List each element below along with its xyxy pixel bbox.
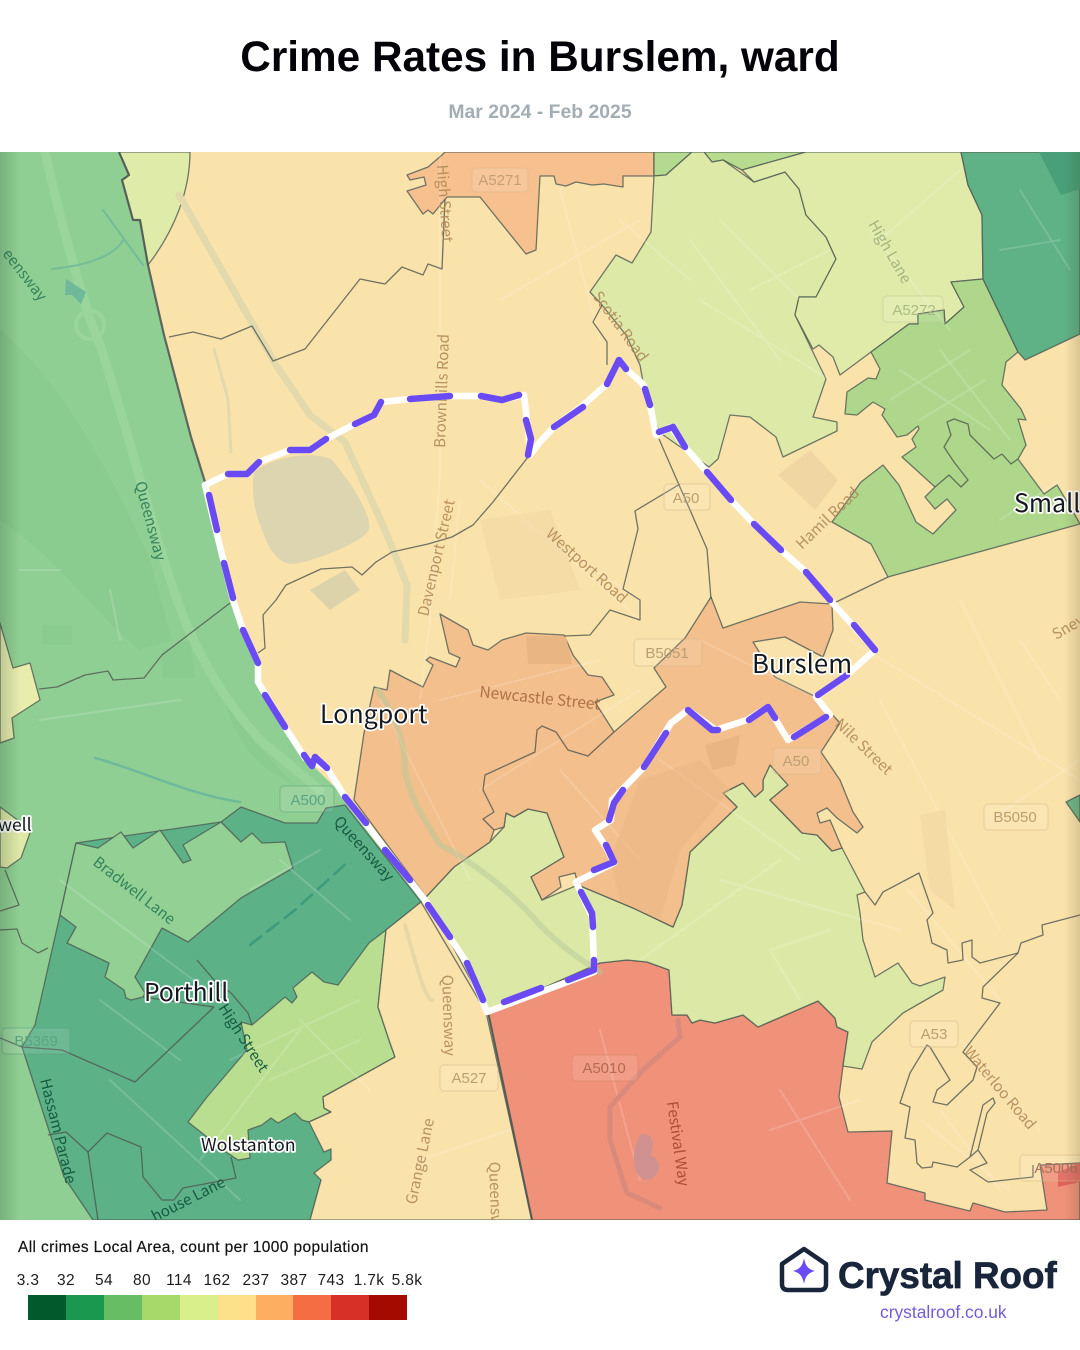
road shields: A5010 — [582, 1060, 626, 1077]
place labels: Small — [1014, 484, 1080, 520]
road labels: Festival Way — [662, 1100, 695, 1188]
south lake — [634, 1134, 659, 1180]
region: north-east pale green — [590, 152, 837, 467]
ward boundary: Burslem — [205, 360, 875, 1012]
icon: Crystal Roof house logo — [780, 1246, 828, 1292]
road shields: A53 — [921, 1026, 947, 1043]
place labels: Wolstanton — [201, 1131, 296, 1157]
logo wordmark: Crystal Roof — [838, 1255, 1057, 1296]
legend scale: 237 — [243, 1272, 269, 1289]
road labels: Bradwell Lane — [89, 851, 180, 929]
road labels: Davenport Street — [412, 497, 460, 618]
road corridors — [45, 152, 680, 1208]
legend scale: 32 — [57, 1272, 75, 1289]
orange darker patches — [526, 636, 740, 920]
region: south tan — [309, 902, 532, 1220]
title: Crime Rates in Burslem, ward — [240, 33, 840, 80]
map base area: tan — [0, 152, 1080, 1220]
region: north-east dark green — [961, 152, 1080, 360]
road labels: Queensway — [329, 811, 399, 886]
road labels: High Street — [432, 164, 458, 243]
place labels — [0, 484, 1080, 1157]
region: south red — [488, 960, 1080, 1220]
region: south-east dark red — [1058, 1163, 1080, 1187]
legend scale: 743 — [318, 1272, 344, 1289]
map right edge shade — [1064, 152, 1080, 1220]
road shields: A50 — [783, 753, 809, 770]
legend scale: 5.8k — [392, 1272, 422, 1289]
road labels: High Lane — [864, 216, 917, 287]
region: west pale — [0, 623, 40, 743]
road labels: High Street — [214, 999, 274, 1076]
region: central-south pale green — [426, 765, 945, 1069]
tan darker patches — [310, 450, 955, 910]
road labels: Hamil Road — [791, 482, 864, 554]
patches in west green — [0, 330, 300, 790]
pond — [65, 279, 86, 304]
road shields: A527 — [451, 1070, 487, 1087]
road labels: Nile Street — [831, 713, 898, 779]
road labels: Waterloo Road — [959, 1042, 1041, 1134]
region: north green wedges — [654, 152, 692, 176]
legend scale: 80 — [133, 1272, 151, 1289]
region boundary lines — [0, 199, 1080, 1220]
legend scale: 387 — [281, 1272, 307, 1289]
road labels: Scotia Road — [588, 287, 653, 366]
faint street network — [20, 152, 1080, 1200]
region: Burslem orange — [354, 597, 863, 927]
road shields: A5272 — [892, 302, 936, 319]
road shields: A5271 — [478, 172, 522, 189]
legend scale — [17, 1272, 422, 1320]
panel: choropleth map — [0, 152, 1080, 1220]
road labels: Westport Road — [542, 523, 632, 608]
road shields: A500 — [290, 792, 326, 809]
road shields — [2, 168, 1080, 1181]
region: west green — [0, 152, 425, 1220]
place labels: Longport — [320, 695, 428, 731]
legend scale: 162 — [204, 1272, 230, 1289]
thick boundary edges — [119, 152, 532, 1220]
region: well pale — [0, 807, 31, 868]
map regions — [0, 152, 1080, 1220]
legend scale: 54 — [95, 1272, 113, 1289]
place labels: Porthill — [144, 973, 228, 1009]
region: east mid-green — [832, 279, 1080, 577]
region: north orange — [407, 152, 654, 254]
legend scale: 1.7k — [354, 1272, 384, 1289]
map left edge shade — [0, 152, 20, 1220]
road labels — [0, 164, 1080, 1243]
region: Bradwell — [60, 822, 293, 1000]
subtitle: date range: Mar 2024 - Feb 2025 — [448, 101, 632, 123]
region: north-west pale wedge — [119, 152, 190, 265]
road shields: A50 — [673, 490, 699, 507]
region: small east green — [1066, 795, 1080, 822]
legend scale: 114 — [166, 1272, 192, 1289]
legend scale: 3.3 — [17, 1272, 39, 1289]
road shields: B5369 — [14, 1033, 58, 1050]
road shields: B5050 — [993, 809, 1037, 826]
place labels: Burslem — [752, 644, 852, 681]
road labels: Grange Lane — [400, 1116, 439, 1206]
website url: crystalroof.co.uk — [880, 1302, 1007, 1322]
road labels: Hassam Parade — [35, 1076, 82, 1186]
legend title: All crimes Local Area, count per 1000 population — [18, 1239, 369, 1256]
road labels: Brownhills Road — [429, 334, 454, 448]
road shields: B5051 — [645, 645, 689, 662]
road shields: A5006 — [1034, 1160, 1078, 1177]
region: Wolstanton light green — [188, 930, 395, 1160]
reservoir area — [253, 455, 369, 564]
road labels: Queensway — [437, 974, 461, 1056]
road labels: Newcastle Street — [478, 680, 602, 715]
road labels: Queensway — [130, 479, 172, 563]
region: Porthill dark green — [22, 805, 421, 1220]
